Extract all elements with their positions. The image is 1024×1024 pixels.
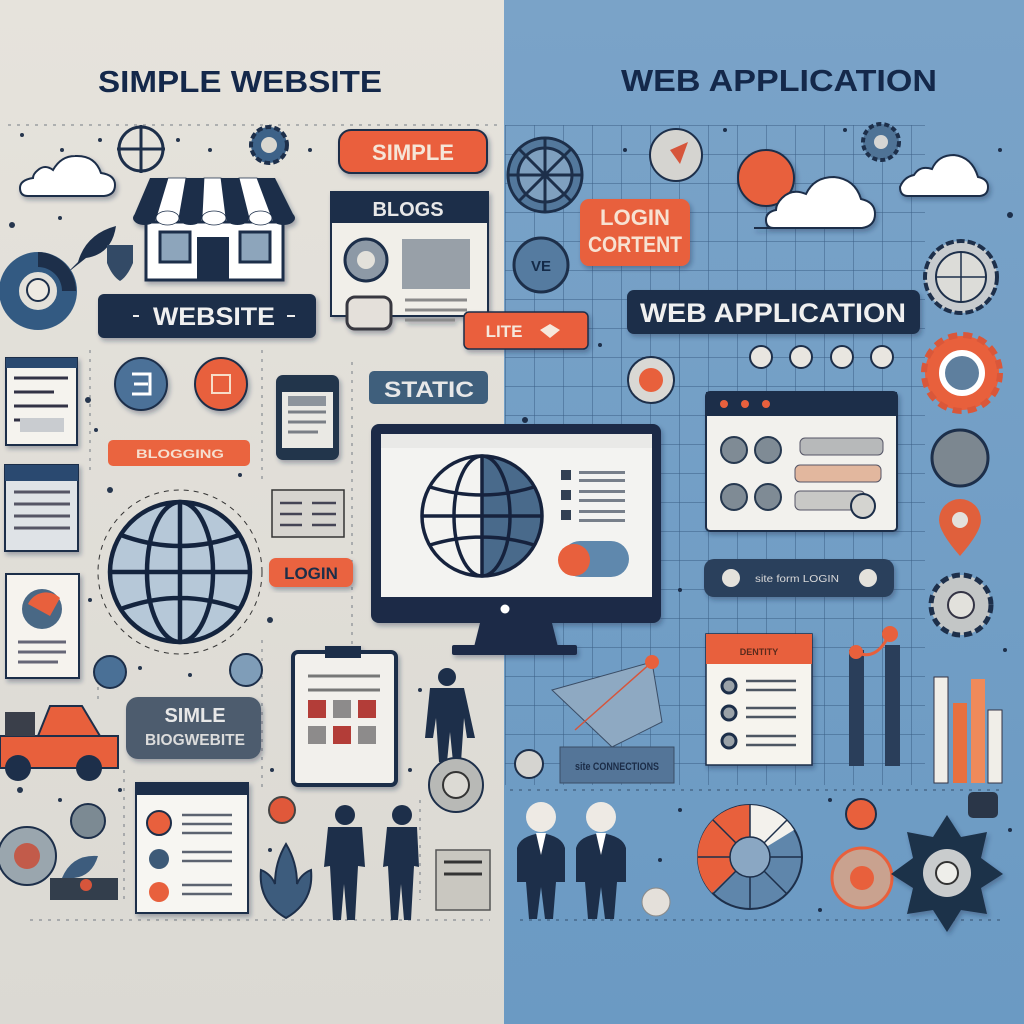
panel: app window: [706, 392, 897, 531]
icon: blue round badge: [115, 358, 167, 410]
bar: connections: site CONNECTIONS: [575, 761, 659, 773]
icon: compass: [650, 129, 702, 181]
row of small dots: [750, 346, 893, 368]
badge: simple website blurred: BIOGWEBITE: [145, 732, 245, 749]
document card orange: [6, 574, 79, 678]
icon: medallion: [832, 848, 892, 908]
icon: sun cloud: [738, 150, 875, 228]
icon: grey gear right: [931, 575, 991, 635]
icon: donut chart left: [9, 252, 76, 320]
panel: report card: [706, 634, 812, 765]
document card blue: [5, 465, 78, 551]
toggle button: [558, 541, 629, 577]
scattered dots left: [9, 133, 422, 852]
badge: lite: [464, 312, 588, 349]
icon: storefront: [133, 178, 295, 280]
badge: login content: CORTENT: [588, 232, 682, 257]
list lines: [561, 470, 625, 522]
icon: leaf sprig: [66, 226, 116, 274]
right grid: [505, 125, 925, 785]
scattered dots right: [518, 128, 1013, 912]
bar: connections: [560, 747, 674, 783]
panel: monitor: [371, 424, 661, 655]
panel: report card: DENTITY: [740, 647, 778, 657]
dark label bar: site form LOGIN: [755, 574, 839, 585]
icon: stack base: [50, 856, 118, 900]
icon: crosshair gauge right: [925, 241, 997, 313]
icon: small gear: [71, 804, 105, 838]
icon: ve circle: VE: [531, 258, 551, 275]
icon: grey coin: [429, 758, 483, 812]
icon: small shield: [107, 245, 133, 281]
icon: dark small box: [968, 792, 998, 818]
icon: large globe: [98, 490, 262, 654]
icon: small circles pair: [94, 654, 262, 688]
badge: login left: LOGIN: [284, 564, 338, 583]
dark label bar: [704, 559, 894, 597]
icon: orange car: [0, 706, 118, 781]
badge: web application: [627, 290, 920, 334]
person: standing businessman: [425, 668, 475, 762]
panel: clipboard: [293, 646, 396, 785]
badge: website: WEBSITE: [153, 303, 275, 331]
title: simple website: SIMPLE WEBSITE: [98, 64, 382, 99]
icon: red dot: [269, 797, 295, 823]
panel: blogs card: [331, 192, 488, 329]
badge: static: STATIC: [384, 377, 474, 402]
icon: small grey circle: [515, 750, 543, 778]
icon: tablet: [276, 375, 339, 460]
panel: checklist card: [136, 783, 248, 913]
badge: static: [369, 371, 488, 404]
icon: gear top left: [251, 127, 287, 163]
icon: dark star gear: [891, 815, 1003, 932]
badge: website: [98, 294, 316, 338]
icon: target left: [0, 827, 56, 885]
left dashed guide lines: [8, 125, 500, 920]
chart: pillars with connector: [849, 626, 900, 766]
icon: orange round badge: [195, 358, 247, 410]
icon: gear top right: [863, 124, 899, 160]
badge: web application: WEB APPLICATION: [640, 298, 906, 328]
badge: simple: SIMPLE: [372, 140, 454, 165]
globe in monitor: [422, 456, 542, 576]
people: two businessmen: [517, 802, 626, 919]
badge: simple website blurred: [126, 697, 261, 759]
small sketch box: [436, 850, 490, 910]
panel: blogs card: BLOGS: [372, 199, 444, 221]
icon: orange pin circle: [628, 357, 674, 403]
icon: crosshair circle: [117, 125, 165, 173]
people: two men: [324, 805, 419, 920]
right background panel: [504, 0, 1024, 1024]
icon: dark seal: [932, 430, 988, 486]
icon: pale circle: [642, 888, 670, 916]
badge: lite: LITE: [486, 322, 522, 341]
bar chart: [934, 677, 1002, 783]
icon: cloud left: [20, 156, 115, 196]
icon: radial wheel: [508, 138, 582, 212]
badge: login content: LOGIN: [600, 205, 670, 230]
icon: cloud right: [900, 155, 988, 196]
orange label bar: [108, 440, 250, 466]
icon: map pin: [939, 499, 981, 556]
badge: simple: [339, 130, 487, 173]
icon: ve circle: [514, 238, 568, 292]
icon: plant: [261, 844, 311, 918]
badge: login left: [269, 558, 353, 587]
icon: orange medallion top: [846, 799, 876, 829]
network graph: [552, 655, 662, 747]
badge: simple website blurred: SIMLE: [164, 705, 226, 727]
icon: orange gear: [924, 335, 1000, 411]
left background panel: [0, 0, 504, 1024]
right dashed guide lines: [510, 790, 1000, 920]
chart: pie: [698, 805, 802, 909]
document card left: [6, 358, 77, 445]
badge: login content: [580, 199, 690, 266]
small mini card: [272, 490, 344, 537]
orange label bar: BLOGGING: [136, 447, 224, 461]
title: web application: WEB APPLICATION: [621, 63, 937, 98]
